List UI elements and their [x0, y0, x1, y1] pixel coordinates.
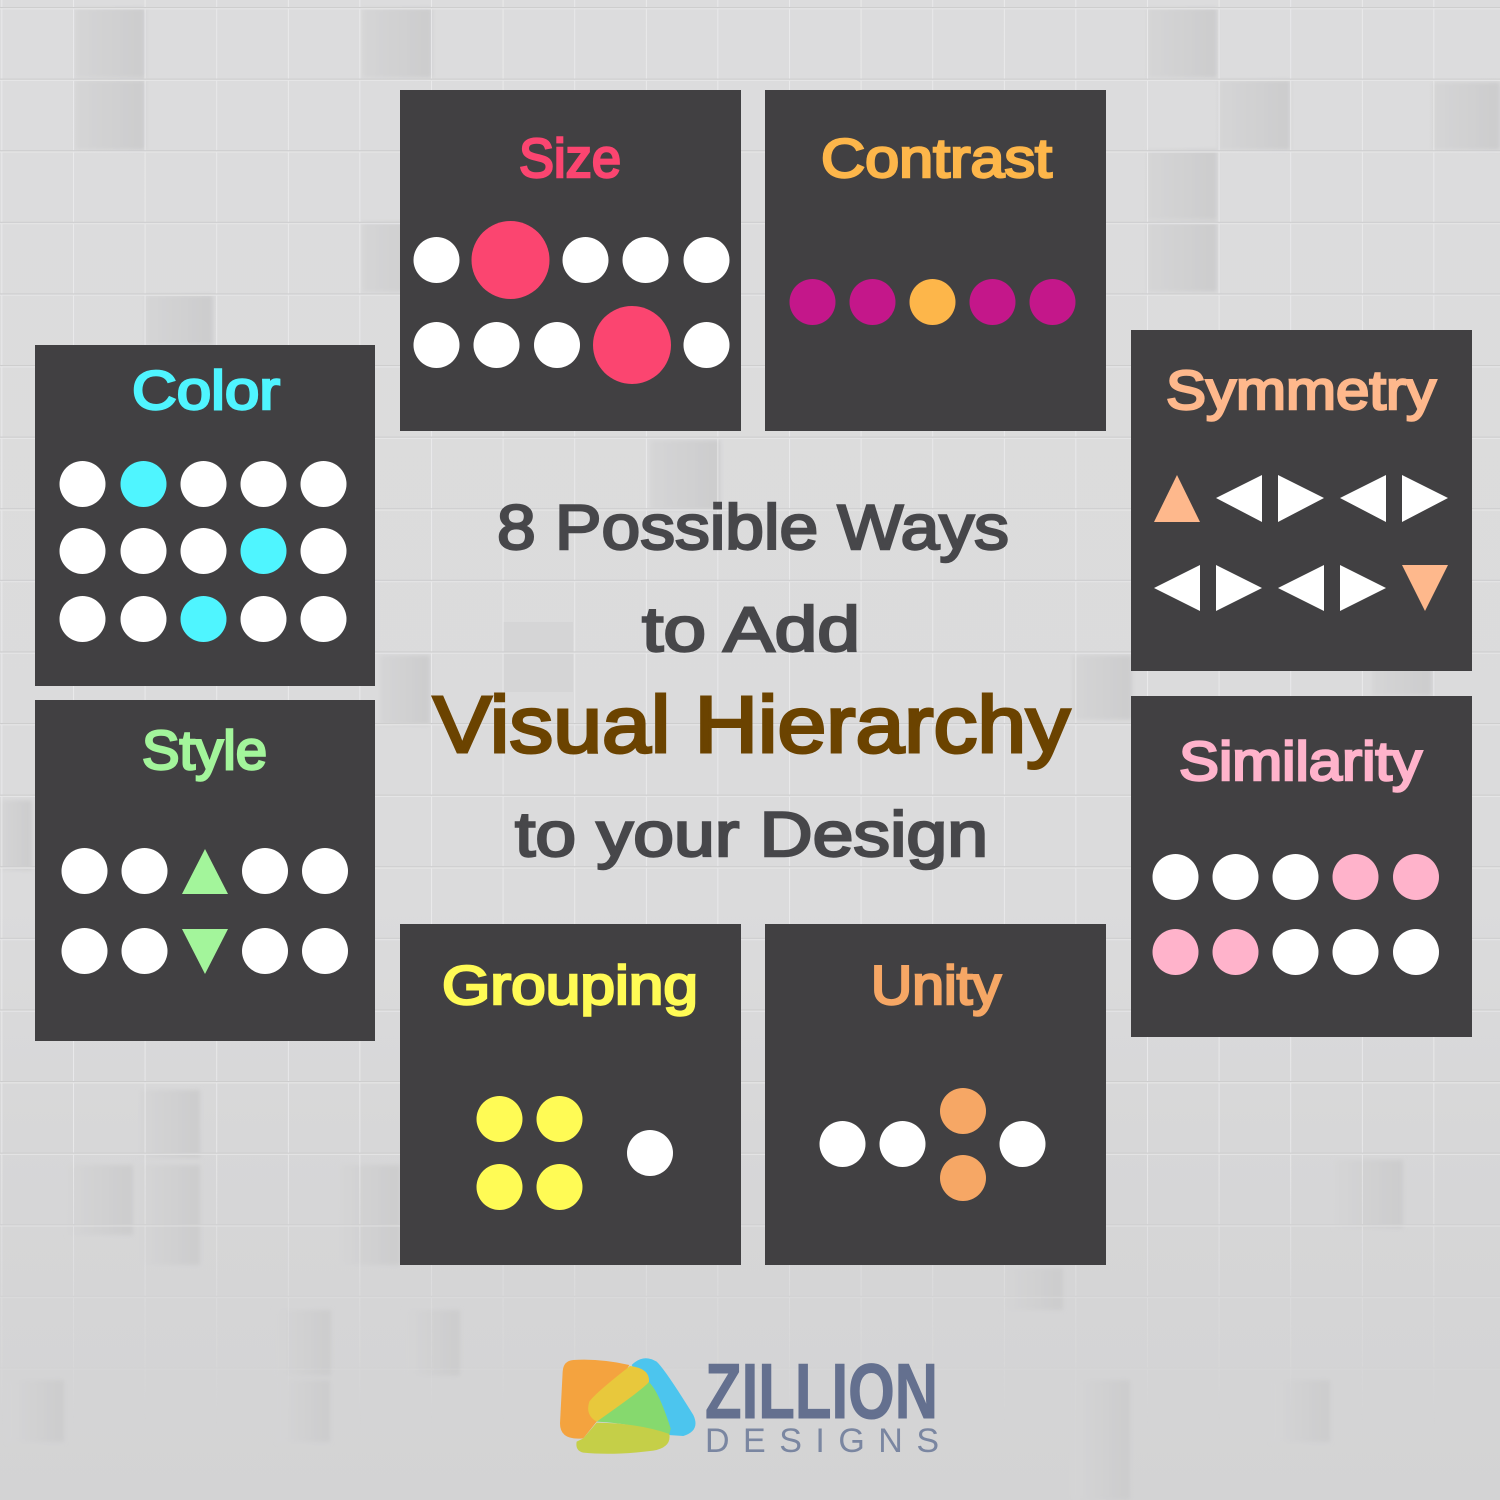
title: Visual Hierarchy	[433, 680, 1070, 769]
dots: color examples	[60, 461, 346, 642]
triangles: symmetry examples	[1154, 475, 1448, 611]
title: 8 Possible Ways	[497, 493, 1009, 563]
panel: Color	[35, 345, 375, 686]
panel: Grouping	[400, 924, 741, 1265]
title	[433, 493, 1070, 870]
panel: Unity	[765, 924, 1106, 1265]
dots: grouping examples	[476, 1096, 673, 1210]
heading: Unity: Unity	[871, 954, 1002, 1016]
heading: Size: Size	[519, 127, 621, 189]
shapes: style examples	[62, 848, 348, 974]
dots: size examples	[414, 221, 730, 384]
wordmark: ZILLION: ZILLION	[705, 1347, 938, 1435]
dots: contrast examples	[790, 279, 1076, 325]
heading: Contrast: Contrast	[821, 127, 1052, 189]
heading: Style: Style	[142, 719, 267, 781]
wordmark: DESIGNS: DESIGNS	[705, 1422, 939, 1460]
panel: Similarity	[1131, 696, 1472, 1037]
logo: Zillion Designs	[560, 1347, 939, 1460]
panel: Contrast	[765, 90, 1106, 431]
heading: Similarity: Similarity	[1179, 730, 1423, 792]
heading: Grouping: Grouping	[442, 954, 698, 1016]
icon: overlapping colour shapes	[560, 1358, 695, 1454]
heading: Color: Color	[132, 359, 280, 421]
heading: Symmetry: Symmetry	[1166, 359, 1437, 421]
dots: similarity examples	[1152, 854, 1439, 975]
title: to your Design	[515, 800, 988, 870]
panel: Size	[400, 90, 741, 431]
title: to Add	[642, 595, 860, 665]
dots: unity examples	[820, 1088, 1046, 1201]
panel: Style	[35, 700, 375, 1041]
panel: Symmetry	[1131, 330, 1472, 671]
